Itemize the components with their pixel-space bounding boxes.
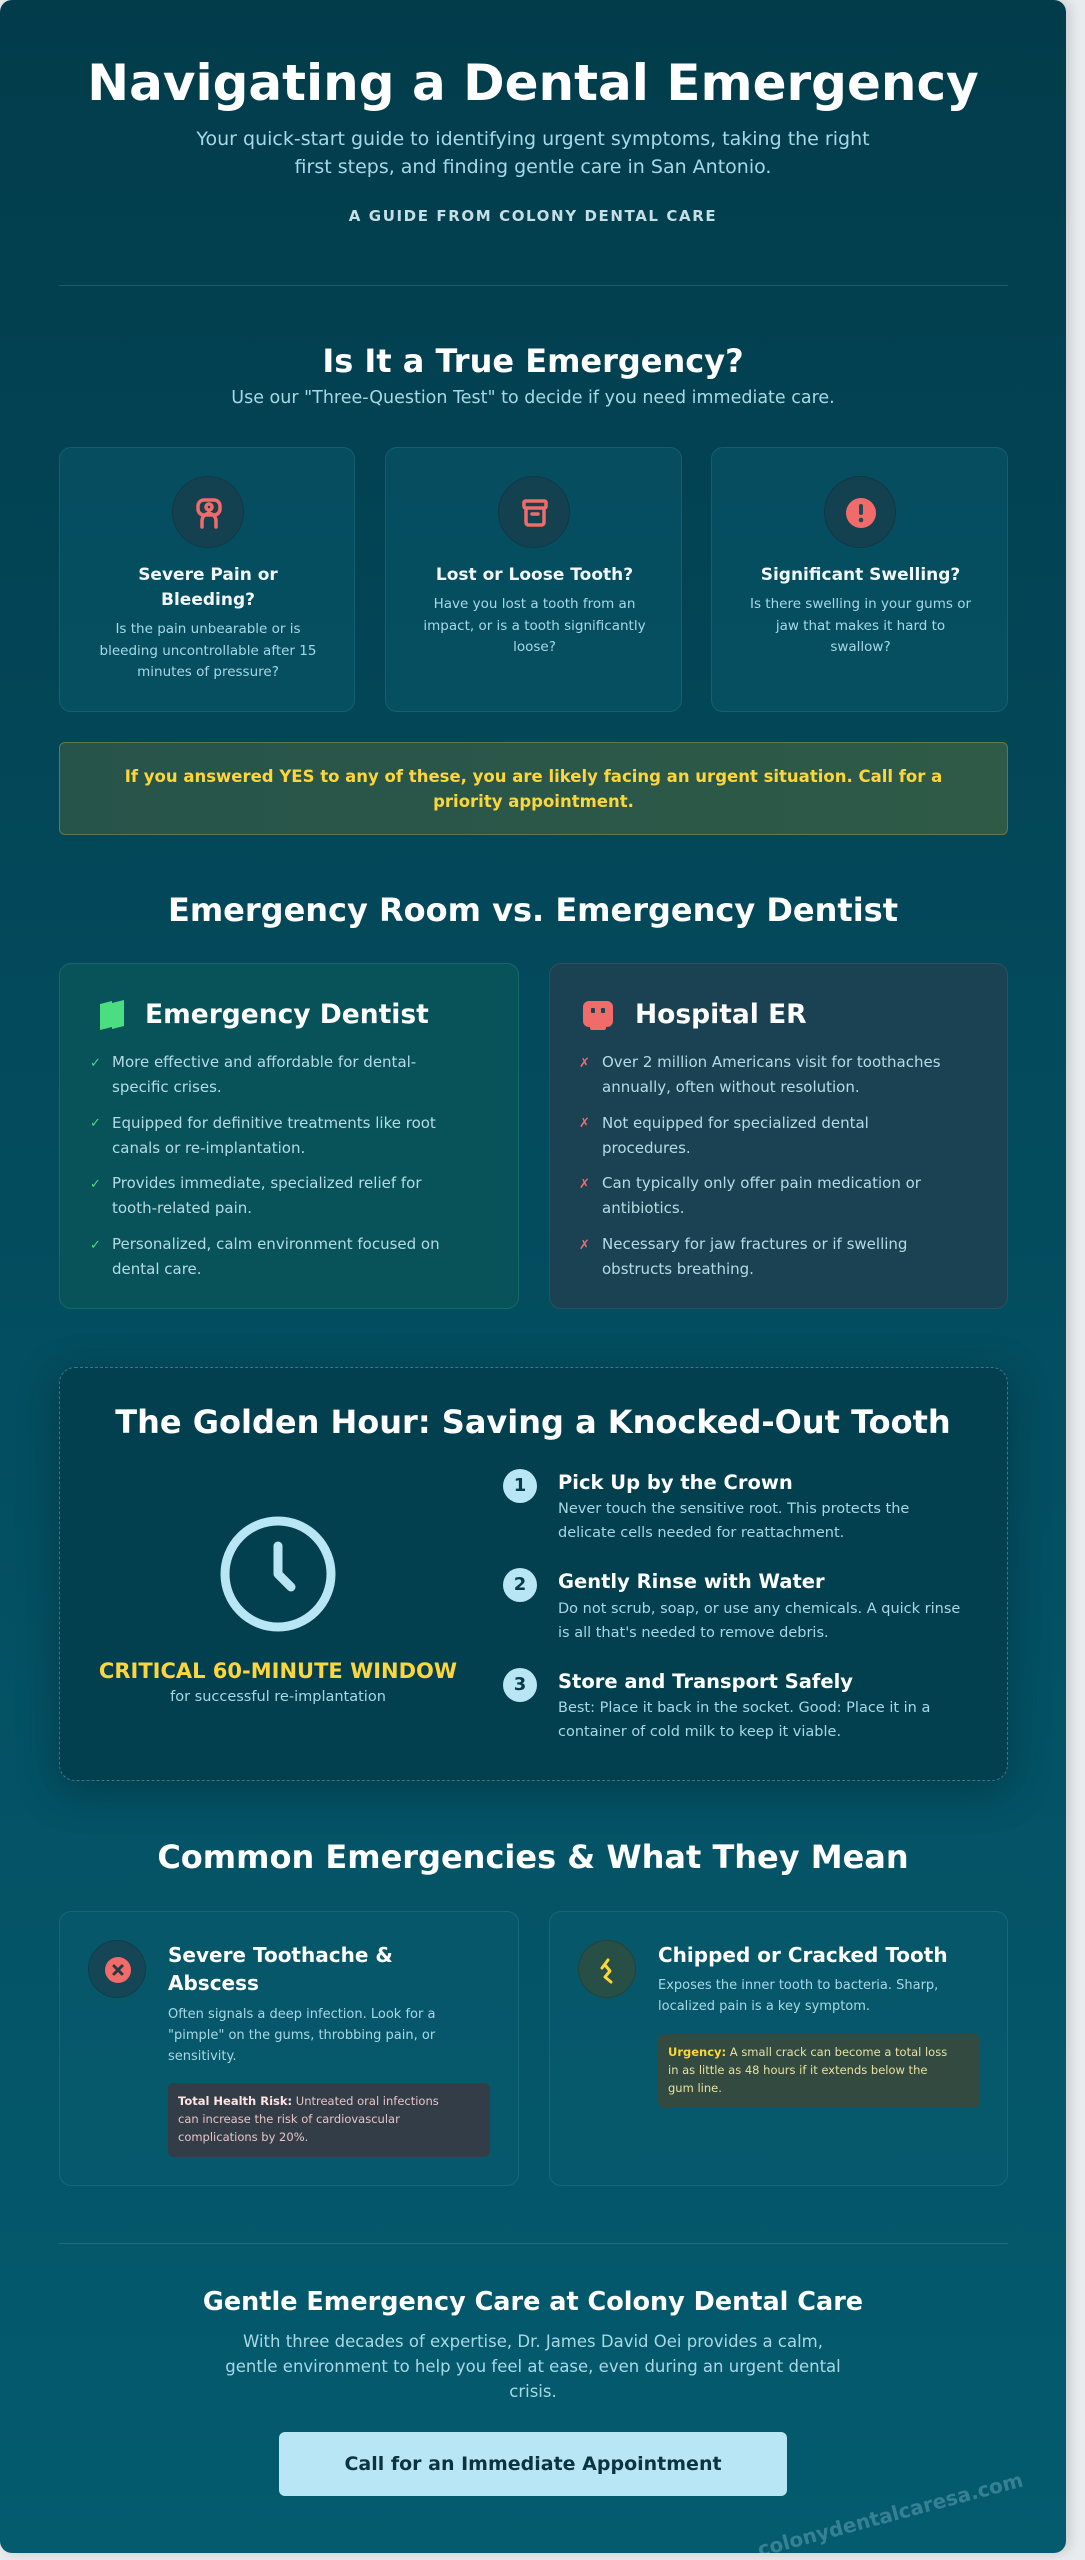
cons list: Necessary for jaw fractures or if swelling obstructs breathing. [602,1235,907,1278]
callout: yes banner: If you answered YES to any of these, you are likely facing an urgent situation. Call for a priority appointment. [125,767,942,811]
risk callout: Total Health Risk: Untreated oral infections can increase the risk of cardiovascular complications by 20%. [178,2094,439,2144]
step 1: Pick Up by the Crown [558,1471,793,1494]
cons list: ✗ [579,1238,590,1253]
guide tag: A GUIDE FROM COLONY DENTAL CARE [349,207,717,225]
panel: golden hour [59,1367,1008,1781]
critical sub: for successful re-implantation [170,1689,386,1705]
pros list: Provides immediate, specialized relief for tooth-related pain. [112,1174,422,1217]
text: Often signals a deep infection. Look for a "pimple" on the gums, throbbing pain, or sensitivity. [168,2007,435,2064]
card: chipped [549,1911,1008,2186]
closing paragraph: gentle environment to help you feel at ease, even during an urgent dental crisis. [225,2357,841,2401]
urgency callout [658,2034,980,2108]
subtitle: Your quick-start guide to identifying urgent symptoms, taking the right [196,128,870,150]
step 2: Do not scrub, soap, or use any chemicals. A quick rinse is all that's needed to remove debris. [558,1601,960,1641]
cons list: ✗ [579,1177,590,1192]
pros list [90,1053,440,1278]
subtitle [196,128,870,178]
pros list: ✓ [90,1177,101,1192]
title: Chipped or Cracked Tooth [658,1943,948,1967]
card text: Have you lost a tooth from an impact, or is a tooth significantly loose? [423,596,646,655]
cons list: ✗ [579,1056,590,1071]
heading: true emergency: Is It a True Emergency? [322,342,744,380]
card: swelling [711,447,1008,712]
button: call [279,2432,787,2496]
callout: yes banner [59,742,1008,835]
card text: Is there swelling in your gums or jaw that makes it hard to swallow? [750,596,971,655]
step 1: Never touch the sensitive root. This protects the delicate cells needed for reattachment. [558,1501,909,1541]
step 2: Gently Rinse with Water [558,1570,825,1593]
pros list: More effective and affordable for dental-specific crises. [112,1053,416,1096]
text: Exposes the inner tooth to bacteria. Sharp, localized pain is a key symptom. [658,1978,938,2014]
step 3: 3 [514,1674,526,1695]
cons list [579,1053,941,1278]
step 1: 1 [514,1475,526,1496]
risk callout [168,2083,490,2157]
step 3 [503,1668,930,1740]
step 3: Store and Transport Safely [558,1670,853,1693]
cons list: ✗ [579,1116,590,1131]
pros list: ✓ [90,1056,101,1071]
heading: common emergencies: Common Emergencies & What They Mean [157,1838,909,1876]
icon: x [88,1940,146,1998]
step 1 [503,1469,909,1541]
card: severe pain [59,447,355,712]
urgency callout: Urgency: A small crack can become a total loss in as little as 48 hours if it extends below the gum line. [668,2045,947,2095]
title: Navigating a Dental Emergency [87,54,979,112]
icon: bolt [578,1940,636,1998]
card title: Significant Swelling? [761,565,960,585]
icon: person [172,476,244,548]
subtitle: first steps, and finding gentle care in San Antonio. [295,156,771,178]
closing paragraph: With three decades of expertise, Dr. James David Oei provides a calm, [243,2332,823,2351]
cons list: Over 2 million Americans visit for toothaches annually, often without resolution. [602,1053,941,1096]
steps [503,1469,960,1740]
cons list: Not equipped for specialized dental procedures. [602,1114,869,1157]
panel heading: Hospital ER [635,999,807,1030]
button: call: Call for an Immediate Appointment [344,2453,722,2475]
closing paragraph [225,2332,841,2401]
heading: The Golden Hour: Saving a Knocked-Out Tooth [115,1403,951,1441]
cons list: Can typically only offer pain medication or antibiotics. [602,1174,921,1217]
pros list: Personalized, calm environment focused on dental care. [112,1235,440,1278]
panel heading: Emergency Dentist [145,999,429,1030]
title: Severe Toothache & Abscess [168,1943,393,1995]
panel: emergency dentist [59,963,519,1309]
panel: hospital ER [549,963,1008,1309]
card title: Severe Pain or Bleeding? [138,565,278,610]
critical window label: CRITICAL 60-MINUTE WINDOW [99,1659,457,1683]
icon: alert [824,476,896,548]
step 2 [503,1568,960,1641]
heading: ER vs dentist: Emergency Room vs. Emergency Dentist [168,891,898,929]
subheading: Use our "Three-Question Test" to decide if you need immediate care. [231,388,835,408]
pros list: Equipped for definitive treatments like root canals or re-implantation. [112,1114,436,1157]
icon: dentist [100,1000,124,1030]
card title: Lost or Loose Tooth? [436,565,633,585]
pros list: ✓ [90,1238,101,1253]
card: toothache [59,1911,519,2186]
card: lost tooth [385,447,682,712]
icon: hospital [583,1001,613,1030]
icon: box [498,476,570,548]
icon: clock [220,1516,336,1632]
card text: Is the pain unbearable or is bleeding uncontrollable after 15 minutes of pressure? [100,621,316,680]
pros list: ✓ [90,1116,101,1131]
step 2: 2 [514,1574,526,1595]
step 3: Best: Place it back in the socket. Good: Place it in a container of cold milk to keep it viable. [558,1700,930,1740]
heading: gentle care: Gentle Emergency Care at Colony Dental Care [203,2287,863,2317]
